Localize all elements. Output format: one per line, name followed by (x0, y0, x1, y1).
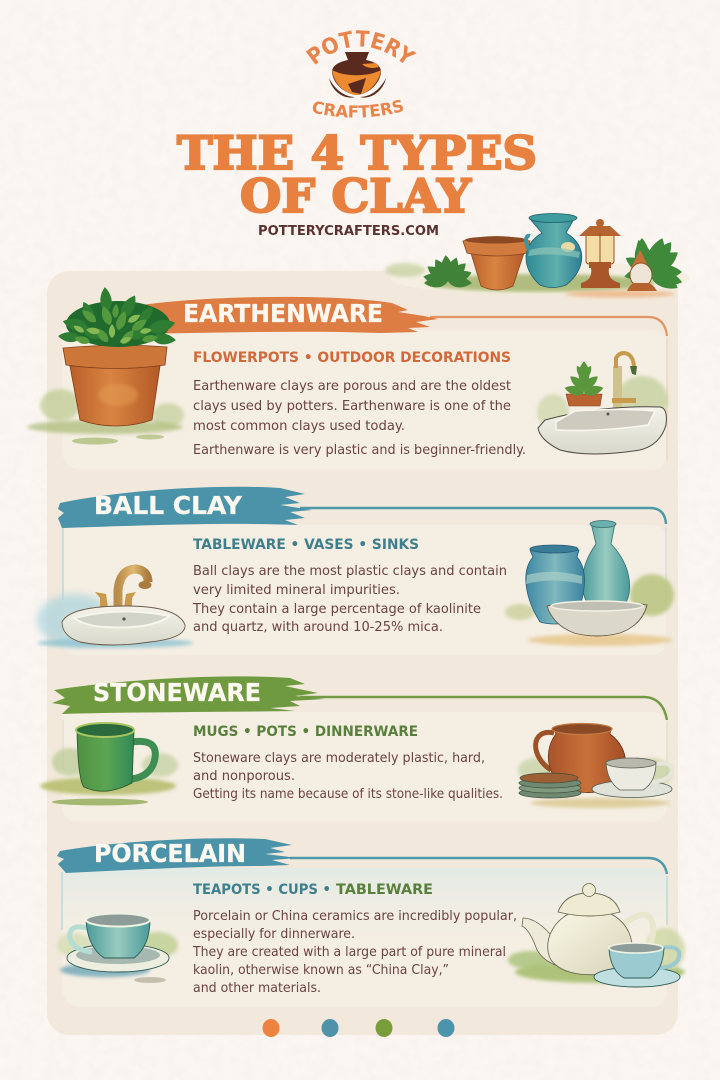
body text (192, 909, 517, 996)
heading brush (52, 676, 325, 714)
icon: potted plant (27, 287, 184, 444)
panel: Ball Clay (37, 487, 674, 655)
card outline (300, 508, 666, 524)
body text: and quartz, with around 10-25% mica. (193, 620, 443, 635)
heading brush (58, 487, 312, 528)
subheading: TABLEWARE • VASES • SINKS (193, 537, 419, 553)
blue wash (62, 868, 667, 960)
icon: green mug (40, 723, 178, 806)
panel: Porcelain (57, 838, 685, 1007)
icon: clay pot, plates and cup (518, 724, 672, 808)
body text: Earthenware clays are porous and are the oldest (193, 379, 511, 394)
body text: clays used by potters. Earthenware is one of the (193, 399, 511, 414)
card background (62, 525, 666, 655)
body text: Ball clays are the most plastic clays and contain (193, 564, 507, 579)
subheading: TABLEWARE (336, 882, 433, 898)
website: POTTERYCRAFTERS.COM (258, 223, 439, 239)
body text (193, 751, 503, 802)
icon: teapot and cup (508, 884, 685, 987)
icon: sink with small plant (537, 353, 668, 454)
heading brush (57, 838, 298, 873)
subheading: FLOWERPOTS • OUTDOOR DECORATIONS (193, 350, 511, 366)
title: OF CLAY (240, 169, 472, 223)
main panel (47, 271, 678, 1035)
card outline (430, 317, 667, 336)
body text (193, 379, 526, 458)
icon: teal vase (526, 214, 582, 288)
heading: PORCELAIN (94, 839, 246, 868)
body text: most common clays used today. (193, 419, 405, 434)
decorative pottery group (385, 214, 690, 298)
subheading (193, 882, 433, 898)
body text: and other materials. (193, 981, 321, 996)
icon: vases and bowl (505, 520, 674, 646)
panel: Stoneware (40, 676, 672, 822)
body text: Earthenware is very plastic and is beginner-friendly. (193, 443, 526, 458)
body text: They are created with a large part of pure mineral (192, 945, 506, 960)
body text: Getting its name because of its stone-like qualities. (193, 787, 503, 802)
body text: Stoneware clays are moderately plastic, hard, (193, 751, 485, 766)
body text (192, 564, 507, 635)
card background (62, 868, 667, 1007)
body text: kaolin, otherwise known as “China Clay,” (193, 963, 449, 978)
body text: especially for dinnerware. (193, 927, 355, 942)
card outline (300, 697, 667, 720)
body text: very limited mineral impurities. (193, 583, 400, 598)
icon: terracotta pot (463, 236, 530, 290)
heading: EARTHENWARE (183, 299, 383, 328)
icon: lantern (579, 219, 621, 288)
panel: Earthenware (27, 287, 668, 470)
logo: Pottery Crafters: POTTERY (306, 30, 416, 64)
pagination dots (262, 1019, 454, 1037)
card outline (290, 858, 667, 874)
icon: sink with brass faucet (37, 569, 193, 648)
heading brush (135, 297, 438, 334)
body text: and nonporous. (193, 769, 295, 784)
subheading: TEAPOTS • CUPS • (193, 882, 331, 898)
icon: logo vase (329, 52, 386, 98)
body text: Porcelain or China ceramics are incredibly popular, (193, 909, 517, 924)
icon: bush with gnome (623, 235, 684, 294)
card background (62, 712, 667, 822)
title: THE 4 TYPES (177, 126, 537, 180)
icon: leaves (58, 287, 177, 347)
title (177, 126, 537, 223)
icon: teacup and saucer (57, 914, 178, 983)
logo: Pottery Crafters (306, 30, 416, 118)
subheading: MUGS • POTS • DINNERWARE (193, 724, 418, 740)
heading: STONEWARE (93, 678, 261, 707)
heading: BALL CLAY (94, 491, 243, 520)
icon: small plant (422, 255, 473, 288)
card background (62, 330, 667, 470)
body text: They contain a large percentage of kaolinite (192, 602, 481, 617)
logo: Pottery Crafters: CRAFTERS (312, 100, 403, 118)
